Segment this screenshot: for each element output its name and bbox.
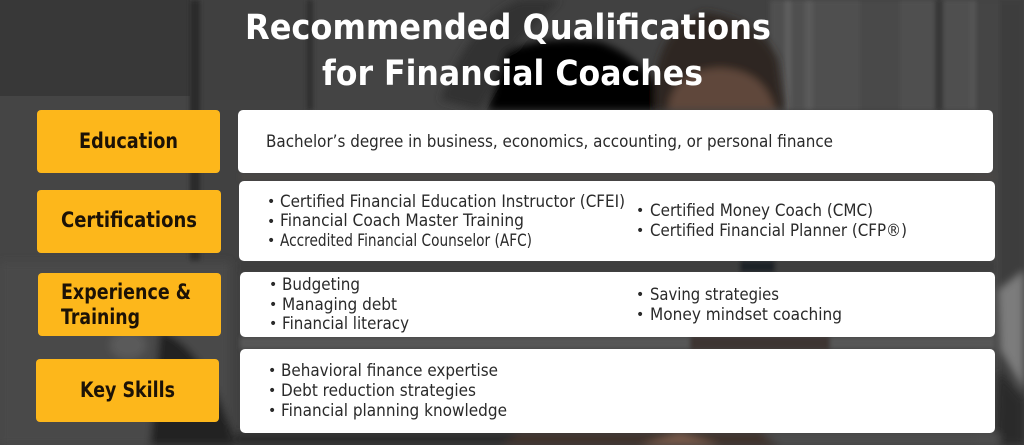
label: experience and training: Training (61, 305, 140, 329)
panel: key skills list: • (268, 363, 276, 379)
panel: certifications list: • (267, 194, 275, 210)
label: key skills (36, 359, 219, 422)
panel: experience list: Financial literacy (282, 314, 409, 333)
panel: key skills list (240, 349, 995, 433)
panel: experience list: • (269, 297, 277, 313)
panel: experience list: • (269, 316, 277, 332)
panel: experience list: • (636, 307, 644, 323)
panel: experience list: Money mindset coaching (650, 305, 842, 324)
row: education (37, 110, 993, 173)
panel: experience list: Budgeting (282, 275, 360, 294)
panel: certifications list: Certified Financial Planner (CFP®) (650, 221, 907, 240)
panel: key skills list: Debt reduction strategies (281, 381, 476, 400)
panel: certifications list: Accredited Financial Counselor (AFC) (280, 231, 532, 250)
row: certifications (37, 181, 995, 261)
title: Recommended Qualifications (245, 8, 771, 48)
panel: experience list: • (269, 277, 277, 293)
panel: certifications list: Financial Coach Master Training (280, 211, 524, 230)
panel: certifications list: • (267, 214, 275, 230)
panel: experience list: • (636, 287, 644, 303)
label: experience and training (38, 273, 221, 336)
label: certifications (37, 190, 221, 253)
panel: key skills list: • (268, 383, 276, 399)
panel: certifications list: • (636, 203, 644, 219)
panel: key skills list: Financial planning knowledge (281, 401, 507, 420)
panel: education details (238, 110, 993, 173)
label: education (37, 110, 220, 173)
panel: certifications list: Certified Money Coach (CMC) (650, 201, 873, 220)
panel: certifications list: Certified Financial Education Instructor (CFEI) (280, 192, 625, 211)
label: certifications: Certifications (61, 208, 197, 232)
row: experience and training (38, 272, 995, 337)
panel: experience list: Saving strategies (650, 285, 779, 304)
label: key skills: Key Skills (80, 378, 175, 402)
panel: experience list: Managing debt (282, 295, 397, 314)
title (245, 8, 771, 94)
panel: certifications list: • (636, 223, 644, 239)
label: experience and training: Experience & (61, 280, 191, 304)
panel: key skills list: Behavioral finance expertise (281, 361, 498, 380)
label: education: Education (79, 129, 178, 153)
panel: certifications list: • (267, 233, 275, 249)
panel: key skills list: • (268, 403, 276, 419)
row: key skills (36, 349, 995, 433)
title: for Financial Coaches (322, 54, 703, 94)
panel: education details: Bachelor’s degree in business, economics, accounting, or personal finance (266, 132, 833, 151)
panel: experience list (240, 272, 995, 337)
panel: certifications list (239, 181, 995, 261)
